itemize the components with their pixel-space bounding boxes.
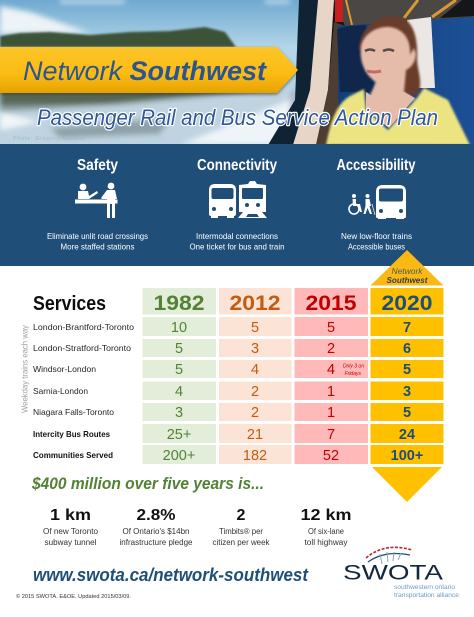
logo: SWOTA: transportation alliance xyxy=(394,593,460,599)
window frame xyxy=(268,0,318,145)
row labels xyxy=(33,322,134,460)
column: 1982: 5 xyxy=(175,341,183,357)
arrow: network southwest up: Southwest xyxy=(386,276,428,285)
vertical axis label: Weekday trains each way xyxy=(20,324,30,413)
column: 2015: 1 xyxy=(327,405,335,421)
stat: subway: Of new Toronto xyxy=(43,527,99,536)
stat: timbits: 2 xyxy=(237,507,246,524)
column: 2012: 21 xyxy=(247,427,263,443)
column: 2015: 52 xyxy=(323,448,339,464)
seat xyxy=(338,17,474,145)
column: safety xyxy=(47,157,148,252)
stat: highway: toll highway xyxy=(304,538,348,547)
yellow top xyxy=(326,88,470,145)
column: 2012 xyxy=(219,288,292,464)
column: 1982: 4 xyxy=(175,384,183,400)
logo: SWOTA: SWOTA xyxy=(343,560,444,584)
row labels: Communities Served xyxy=(33,450,113,460)
cabin wall xyxy=(293,0,334,145)
row labels: Windsor-London xyxy=(33,364,96,374)
website url: www.swota.ca/network-southwest xyxy=(33,565,309,585)
column: 1982: 1982 xyxy=(154,291,205,315)
stat: highway: Of six-lane xyxy=(308,527,344,536)
stat: timbits: Timbits® per xyxy=(219,527,263,536)
column: 2020 xyxy=(370,288,444,464)
arrow: network southwest up: Network xyxy=(392,267,424,276)
column: 2012: 4 xyxy=(251,362,259,378)
column: 1982: 3 xyxy=(175,405,183,421)
column: 2015: 2015 xyxy=(306,291,357,315)
heading: connectivity: Connectivity xyxy=(197,157,277,174)
arrow: network southwest up xyxy=(370,250,444,286)
text: accessibility: New low-floor trains xyxy=(341,231,412,241)
column: 1982: 25+ xyxy=(167,427,191,443)
column: accessibility: Accessible buses xyxy=(348,242,405,252)
banner: Network Southwest xyxy=(0,47,298,93)
icon: staffed station xyxy=(75,183,118,218)
stat: timbits: citizen per week xyxy=(212,538,270,547)
column: 1982: 200+ xyxy=(163,448,195,464)
stat: infrastructure: 2.8% xyxy=(136,507,176,524)
icon: wheelchair, pedestrian and bus xyxy=(349,185,406,219)
column: accessibility xyxy=(336,157,416,252)
column: connectivity xyxy=(190,157,285,252)
row labels: Intercity Bus Routes xyxy=(33,429,110,439)
row labels: London-Stratford-Toronto xyxy=(33,343,131,353)
text: safety: Eliminate unlit road crossings xyxy=(47,231,148,241)
column: safety: More staffed stations xyxy=(60,242,134,252)
stat: subway: subway tunnel xyxy=(44,538,97,547)
row labels: Sarnia-London xyxy=(33,386,88,396)
copyright: © 2015 SWOTA. E&OE. Updated 2015/03/09. xyxy=(16,593,131,600)
note: fridays: Only 3 on xyxy=(343,364,364,370)
column: 1982: 10 xyxy=(171,320,187,336)
row labels: London-Brantford-Toronto xyxy=(33,322,134,332)
stat: infrastructure: infrastructure pledge xyxy=(120,538,192,547)
note: fridays: Fridays xyxy=(345,371,361,377)
column: 2012: 3 xyxy=(251,341,259,357)
row labels: Niagara Falls-Toronto xyxy=(33,407,114,417)
column: 2015: 4 xyxy=(327,362,335,378)
column: 2020: 6 xyxy=(403,341,411,357)
column: 1982: 5 xyxy=(175,362,183,378)
header photo: woman on a train by the window xyxy=(0,0,474,145)
column: 2012: 2012 xyxy=(230,291,281,315)
column: 2020: 2020 xyxy=(382,291,433,315)
column: 2012: 2 xyxy=(251,405,259,421)
heading: accessibility: Accessibility xyxy=(336,157,416,174)
icon: bus and train xyxy=(209,181,267,218)
panel: goals xyxy=(0,144,474,266)
table heading: Services xyxy=(33,292,106,315)
table: services xyxy=(20,288,444,464)
column: 2020: 100+ xyxy=(391,448,423,464)
stat: highway: 12 km xyxy=(300,507,352,524)
stat: subway xyxy=(43,507,99,547)
column: 2012: 2 xyxy=(251,384,259,400)
column: 2012: 5 xyxy=(251,320,259,336)
column: 2020: 7 xyxy=(403,320,411,336)
hair xyxy=(359,16,420,95)
text: connectivity: Intermodal connections xyxy=(196,231,278,241)
column: 2015: 5 xyxy=(327,320,335,336)
arrow: network southwest down xyxy=(372,467,442,502)
face and neck xyxy=(361,27,416,100)
column: 2015 xyxy=(294,288,368,464)
column: 2020: 3 xyxy=(403,384,411,400)
stats xyxy=(43,507,352,547)
heading: safety: Safety xyxy=(77,157,118,174)
logo: SWOTA xyxy=(343,547,460,599)
photo credit: Photo: Gregory Nakano xyxy=(13,136,85,142)
column: 2020: 5 xyxy=(403,362,411,378)
column: 2020: 5 xyxy=(403,405,411,421)
subtitle: Passenger Rail and Bus Service Action Plan xyxy=(37,105,438,130)
stat: subway: 1 km xyxy=(50,507,91,524)
column: 1982 xyxy=(142,288,216,464)
column: connectivity: One ticket for bus and train xyxy=(190,242,285,252)
logo: SWOTA: southwestern ontario xyxy=(394,585,456,591)
cabin ceiling xyxy=(334,0,474,26)
stat: highway xyxy=(300,507,352,547)
stat: timbits xyxy=(212,507,270,547)
headrest cover xyxy=(406,17,435,88)
column: 2012: 182 xyxy=(243,448,267,464)
column: 2015: 2 xyxy=(327,341,335,357)
column: 2015: 1 xyxy=(327,384,335,400)
column: 2020: 24 xyxy=(399,427,415,443)
stat: infrastructure xyxy=(120,507,192,547)
stat: infrastructure: Of Ontario's $14bn xyxy=(122,527,190,536)
note: fridays xyxy=(343,364,364,377)
callout: 400 million: $400 million over five years is... xyxy=(31,475,264,493)
column: 2015: 7 xyxy=(327,427,335,443)
banner title: Network Southwest xyxy=(23,56,267,86)
